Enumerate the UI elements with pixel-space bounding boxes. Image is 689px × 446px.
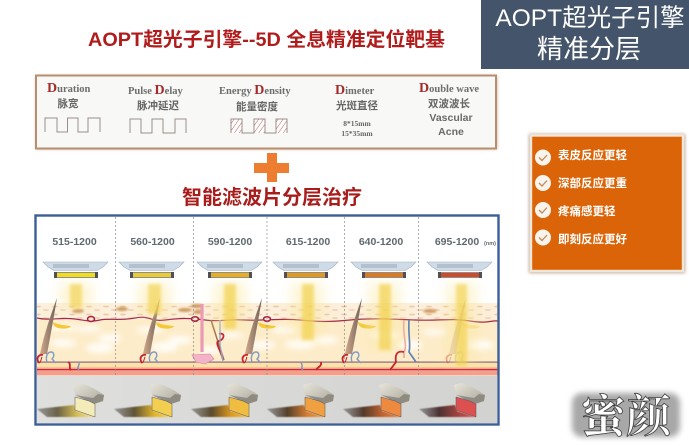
header badge: 精准分层 [537, 34, 641, 64]
benefit: immediate: 即刻反应更好 [558, 232, 627, 246]
parameter: Energy Density: 能量密度 [236, 100, 278, 113]
parameter: Duration: Duration [47, 81, 91, 96]
wavelength labels: (nm) [484, 241, 496, 247]
wavelength labels: 515-1200 [52, 236, 97, 248]
pink and blue vessels [200, 304, 204, 352]
parameter: Double wave: Acne [438, 126, 464, 138]
light beams [60, 283, 477, 366]
bottom tissue layers [37, 362, 498, 368]
panel: five D parameters [36, 76, 497, 149]
parameter: Duration: 脉宽 [58, 97, 79, 110]
parameter: Dimeter: 光斑直径 [336, 99, 378, 112]
benefit: deep [535, 175, 627, 191]
parameter: Double wave: Vascular [429, 112, 473, 124]
title: AOPT超光子引擎--5D 全息精准定位靶基 [88, 28, 445, 51]
parameter: Pulse Delay [128, 83, 186, 133]
parameter: Double wave: Double wave [419, 81, 479, 96]
benefit: pain: 疼痛感更轻 [558, 204, 616, 218]
chart frame [36, 216, 498, 424]
wavelength labels: 695-1200 [435, 236, 479, 248]
panel: benefits [529, 134, 685, 273]
wavelength labels [52, 236, 496, 248]
parameter: Duration [45, 81, 100, 132]
wavelength labels: 560-1200 [130, 236, 175, 248]
parameter: Double wave: 双波波长 [428, 97, 470, 110]
capillary line [37, 317, 498, 322]
panel: filter chart [36, 216, 499, 424]
parameter: Energy Density [219, 83, 291, 133]
wavelength labels: 590-1200 [208, 236, 252, 248]
wavelength labels: 640-1200 [359, 236, 403, 248]
benefit: epidermal: 表皮反应更轻 [558, 148, 627, 162]
hair follicles [38, 298, 71, 363]
handpiece photos [37, 376, 497, 423]
watermark: 蜜颜 [581, 380, 674, 445]
column dividers [116, 217, 418, 376]
benefit: deep: 深部反应更重 [558, 176, 627, 190]
benefit: immediate [535, 230, 627, 246]
parameter: Pulse Delay: Pulse Delay [128, 83, 183, 98]
parameter: Dimeter: Dimeter [335, 83, 375, 98]
skin cross-section [37, 298, 498, 376]
header badge [481, 0, 689, 69]
wavelength labels: 615-1200 [286, 236, 330, 248]
filter devices [43, 262, 492, 278]
parameter: Dimeter: 15*35mm [341, 129, 373, 138]
parameter: Dimeter: 8*15mm [343, 119, 371, 128]
melanin spots [72, 304, 437, 314]
header badge: AOPT超光子引擎 [495, 4, 685, 32]
parameter: Pulse Delay: 脉冲延迟 [137, 99, 179, 112]
parameter: Dimeter [335, 83, 378, 138]
parameter: Energy Density: Energy Density [219, 83, 291, 98]
benefit: pain [535, 202, 616, 218]
icon: plus sign [254, 153, 289, 182]
parameter: Double wave [419, 81, 479, 138]
benefit: epidermal [535, 148, 627, 166]
heading: filter layering: 智能滤波片分层治疗 [182, 186, 362, 209]
